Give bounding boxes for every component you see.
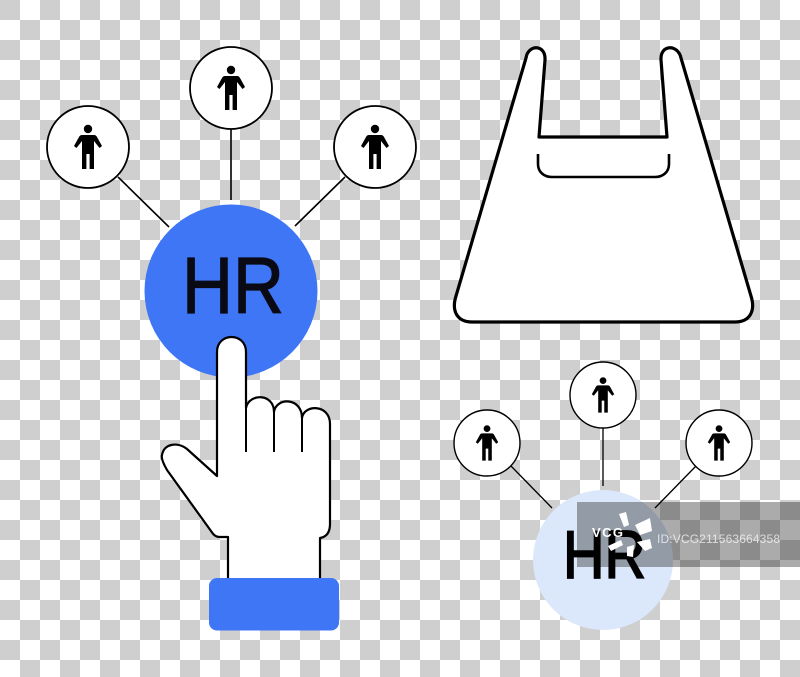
icon: small person node top bbox=[570, 362, 636, 428]
icon: person node right bbox=[334, 106, 416, 188]
finger dividers bbox=[246, 405, 302, 452]
blue HR circle: HR bbox=[182, 241, 284, 330]
watermark logo bbox=[592, 512, 652, 557]
connector lines: pale HR network bbox=[511, 428, 696, 508]
blue HR circle bbox=[144, 204, 318, 378]
watermark band bbox=[577, 502, 800, 567]
icon: person node top bbox=[190, 47, 272, 129]
icon: shopping bag bbox=[454, 48, 753, 322]
icon: small person node left bbox=[454, 410, 520, 476]
watermark id text: ID:VCG211563664358 bbox=[657, 532, 780, 546]
connector lines: blue HR network bbox=[118, 129, 345, 227]
blue cuff bbox=[209, 578, 339, 630]
icon: person node left bbox=[47, 106, 129, 188]
watermark logo: VCG bbox=[592, 525, 623, 540]
icon: pointing hand bbox=[162, 337, 330, 580]
pale HR circle: HR bbox=[563, 517, 646, 593]
pale HR circle bbox=[533, 490, 673, 630]
icon: small person node right bbox=[686, 410, 752, 476]
